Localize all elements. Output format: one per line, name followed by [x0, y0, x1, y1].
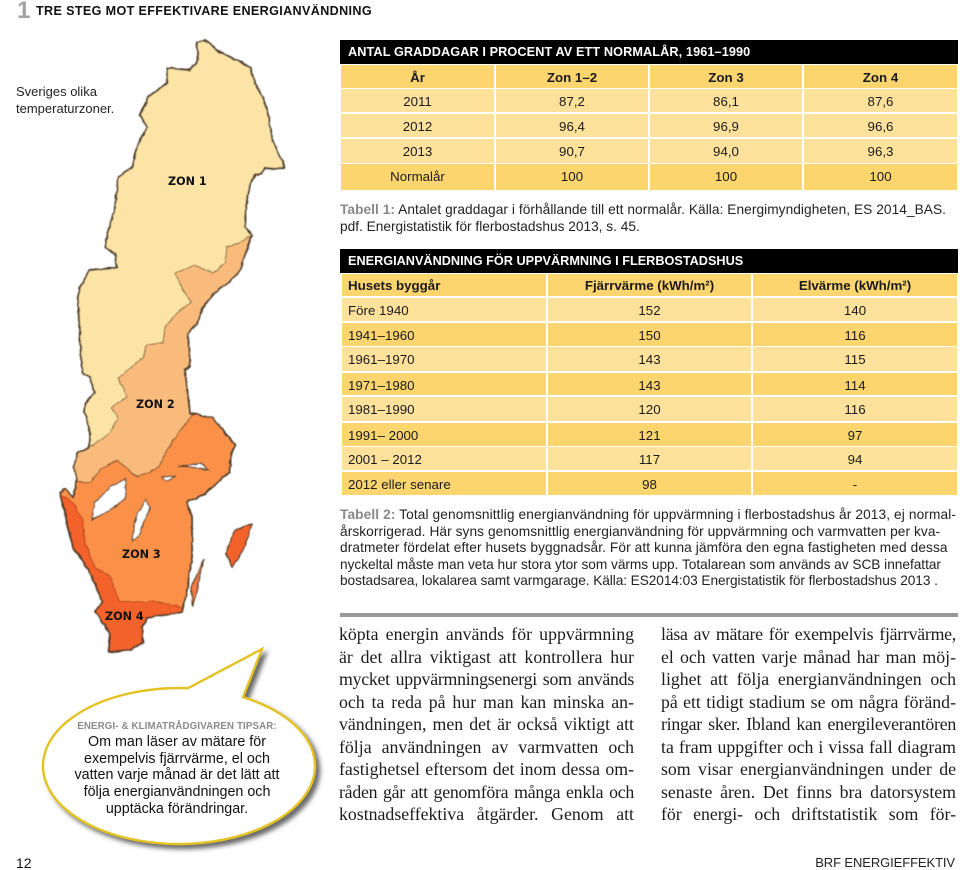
table 1 cells: Zon 1–2: [547, 70, 597, 85]
table 2 cells: 1991– 2000: [348, 428, 418, 443]
callout: speech bubble with tip: [42, 646, 324, 853]
text block: article column 1: mycket uppvärmningsenergi som används: [339, 669, 634, 689]
text block: article column 2: som visar energianvändningen under de: [661, 759, 956, 779]
table 2 cells: Fjärrvärme (kWh/m²): [585, 278, 714, 293]
caption: table 2: dratmeter fördelat efter husets byggnadsår. För att kunna jämföra den egna fastigheten med dessa: [340, 540, 948, 555]
text: map caption: [16, 84, 114, 116]
text block: article column 1: följa användningen av varmvatten och: [339, 736, 634, 756]
table 1 cells: Zon 4: [863, 70, 898, 85]
table 1 cells: 100: [869, 169, 892, 184]
table 1 cells: 100: [715, 169, 737, 184]
table 1 title: [340, 40, 958, 64]
table 2 cells: 1981–1990: [348, 402, 415, 417]
zone labels: ZON 3: [122, 548, 161, 561]
table 1 cells: 86,1: [713, 94, 739, 109]
table 2 cells: 2012 eller senare: [348, 477, 451, 492]
heading: section title: TRE STEG MOT EFFEKTIVARE ENERGIANVÄNDNING: [36, 4, 372, 18]
text block: article column 1: fastighetsel eftersom det inom dessa om-: [339, 759, 634, 779]
table 1 title: ANTAL GRADDAGAR I PROCENT AV ETT NORMALÅR, 1961–1990: [348, 45, 750, 59]
caption: table 1: Tabell 1: Antalet graddagar i förhållande till ett normalår. Källa: Energimyndigheten, ES 2014_BAS.: [340, 202, 946, 217]
callout: speech bubble with tip: exempelvis fjärrvärme, el och: [84, 751, 270, 767]
callout: speech bubble with tip: vatten varje månad är det lätt att: [74, 767, 280, 783]
table 2 cells: 143: [638, 352, 661, 367]
table 1 cells: 2011: [403, 94, 432, 109]
callout: speech bubble with tip: ENERGI- & KLIMATRÅDGIVAREN TIPSAR:: [77, 721, 277, 732]
text block: article column 2: ringar sker. Ibland kan energileverantören: [661, 714, 956, 734]
table 1 cells: 94,0: [713, 144, 739, 159]
table 2 cells: 120: [638, 402, 661, 417]
table 1 cells: 2012: [403, 119, 432, 134]
table 2 cells: 140: [844, 303, 866, 318]
table 1 cells: 96,6: [868, 119, 893, 134]
caption: table 2: bostadsarea, lokalarea samt varmgarage. Källa: ES2014:03 Energistatistik för flerbostadshus 2013 .: [340, 573, 938, 588]
caption: table 1: [340, 202, 946, 234]
table 2 cells: 116: [844, 402, 866, 417]
table 2 cells: Husets byggår: [348, 278, 440, 293]
table 2 cells: Före 1940: [348, 303, 409, 318]
gray rule above article text: [340, 613, 958, 617]
caption: table 2: årskorrigerad. Här syns genomsnittlig energianvändning för uppvärmning och varmvatten per kva-: [340, 524, 940, 539]
callout: speech bubble with tip: upptäcka förändringar.: [106, 801, 248, 817]
text block: article column 1: [339, 624, 634, 824]
table 2 cells: Elvärme (kWh/m²): [799, 278, 911, 293]
map: Swedish temperature zones: [58, 38, 286, 654]
table 2 cells: 121: [638, 428, 661, 443]
footer: magazine name: BRF ENERGIEFFEKTIV: [815, 855, 955, 870]
table 2 cells: 1941–1960: [348, 328, 415, 343]
text block: article column 1: vändningen, men det är också viktigt att: [339, 714, 634, 734]
table 1 cells: 87,2: [559, 94, 585, 109]
table 1 cells: 96,9: [713, 119, 739, 134]
text block: article column 2: senaste åren. Det finns bra datorsystem: [661, 782, 956, 802]
table 2 cells: 116: [844, 328, 866, 343]
caption: table 2: Tabell 2: Total genomsnittlig energianvändning för uppvärmning i flerbostadshus år 2013, ej normal-: [340, 507, 956, 522]
table 2 cells: 117: [639, 452, 660, 467]
table 2 cells: 1971–1980: [348, 378, 415, 393]
table 1 cells: År: [410, 70, 425, 85]
caption: table 2: [340, 507, 956, 588]
table 2 title: [340, 249, 958, 273]
zone labels: ZON 1: [168, 175, 207, 188]
text block: article column 2: [661, 624, 956, 824]
table 2 title: ENERGIANVÄNDNING FÖR UPPVÄRMNING I FLERBOSTADSHUS: [348, 254, 743, 268]
text block: article column 1: och ta reda på hur man kan minska an-: [339, 692, 634, 712]
table 1 cells: 96,4: [559, 119, 585, 134]
table 1 cells: Normalår: [390, 169, 445, 184]
table 2 cells: 114: [844, 378, 866, 393]
text: map caption: Sveriges olika: [16, 84, 97, 99]
caption: table 2: nyckeltal måste man veta hur stora ytor som värms upp. Totalarean som används av SCB innefattar: [340, 557, 941, 572]
table 1 cells: 87,6: [868, 94, 893, 109]
table 1 cells: Zon 3: [708, 70, 744, 85]
table 2 cells: 2001 – 2012: [348, 452, 422, 467]
caption: table 1: pdf. Energistatistik för flerbostadshus 2013, s. 45.: [340, 219, 640, 234]
table 2 cells: 97: [848, 428, 862, 443]
text block: article column 2: på ett tidigt stadium se om några föränd-: [661, 692, 956, 712]
table 1 cells: 96,3: [868, 144, 893, 159]
text: map caption: temperaturzoner.: [16, 101, 114, 116]
table 2 cells: 143: [638, 378, 661, 393]
table 1 cells: 2013: [403, 144, 432, 159]
table 2 cells: 98: [642, 477, 657, 492]
text block: article column 2: ta fram uppgifter och i vissa fall diagram: [661, 736, 956, 756]
text block: article column 2: läsa av mätare för exempelvis fjärrvärme,: [661, 624, 956, 644]
outer outline: [60, 40, 285, 652]
zone labels: ZON 4: [105, 610, 144, 623]
heading: section title: [17, 0, 372, 24]
table 1 cells: 90,7: [559, 144, 585, 159]
table 2 cells: [342, 274, 957, 495]
text block: article column 1: är det allra viktigast att kontrollera hur: [339, 646, 634, 666]
table 2 cells: 94: [848, 452, 862, 467]
text block: article column 1: råden går att genomföra många enkla och: [339, 782, 634, 802]
text block: article column 1: kostnadseffektiva åtgärder. Genom att: [339, 804, 634, 824]
text block: article column 1: köpta energin används för uppvärmning: [339, 624, 634, 644]
table 2 cells: 150: [638, 328, 661, 343]
table 2 cells: 1961–1970: [348, 352, 415, 367]
table 1 cells: [341, 65, 957, 190]
table 2 cells: 152: [638, 303, 661, 318]
islands: [226, 524, 252, 567]
table 2 cells: 115: [844, 352, 866, 367]
table 2 cells: -: [853, 477, 857, 492]
text block: article column 2: el och vatten varje månad har man möj-: [661, 646, 956, 666]
lakes: [92, 463, 208, 540]
zone labels: [105, 175, 207, 623]
text block: article column 2: lighet att följa energianvändningen och: [661, 669, 956, 689]
table 1 cells: 100: [561, 169, 583, 184]
callout: speech bubble with tip: följa energianvändningen och: [84, 784, 270, 800]
text block: article column 2: för energi- och driftstatistik som för-: [661, 804, 956, 824]
callout: speech bubble with tip: Om man läser av mätare för: [88, 734, 266, 750]
zone labels: ZON 2: [136, 398, 175, 411]
